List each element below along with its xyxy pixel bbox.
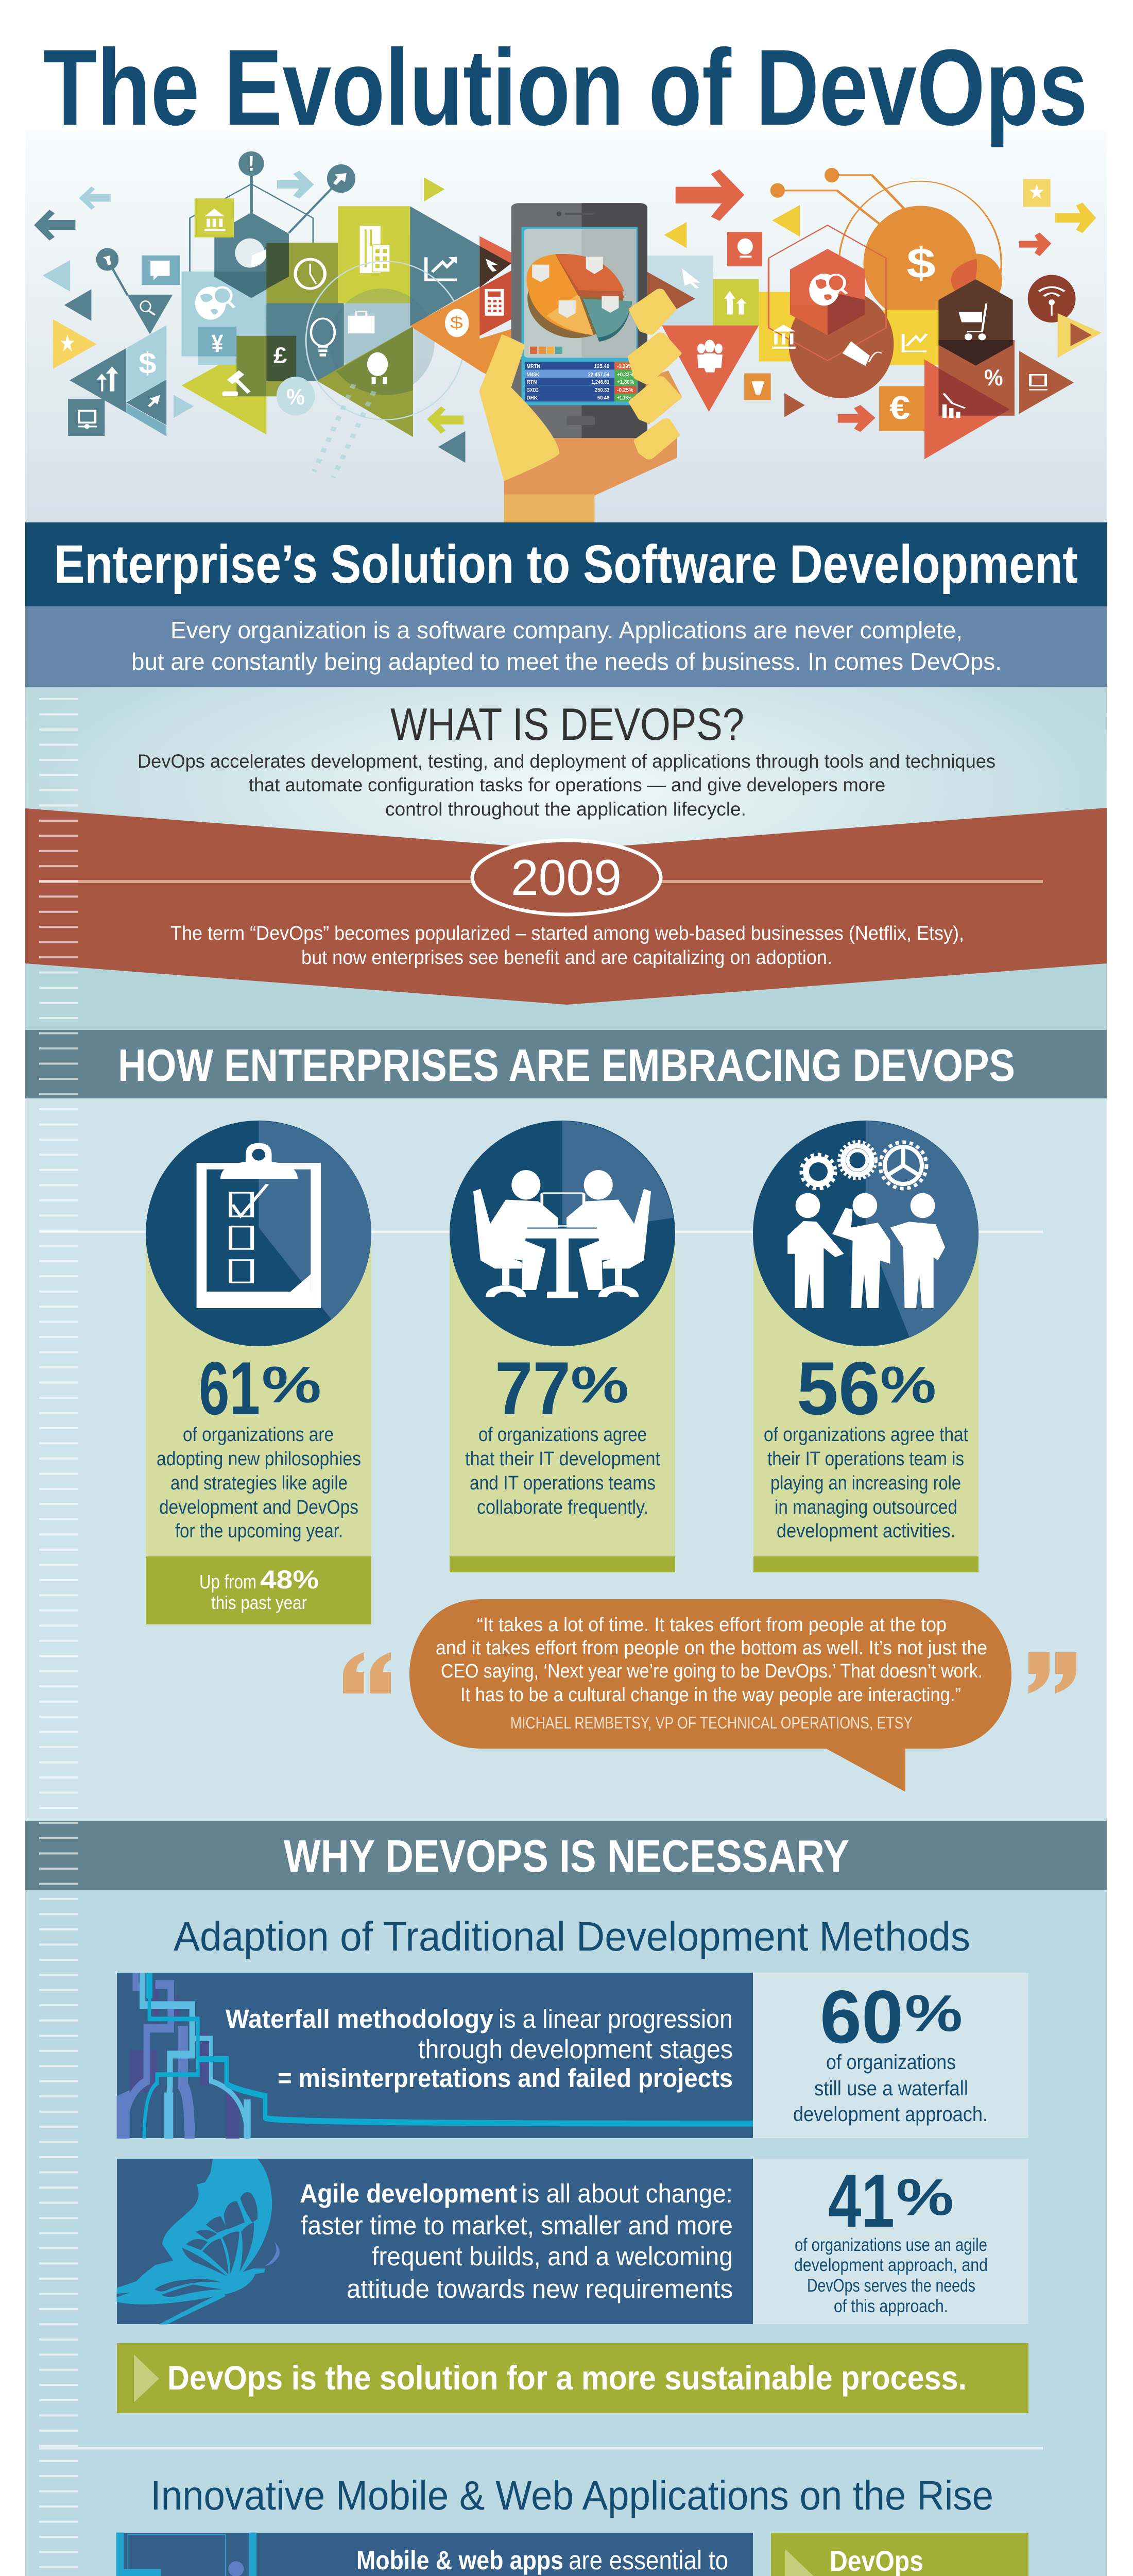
- hero illustration: phone, hand and right cluster: +1.13%: [617, 395, 631, 401]
- timeline ticks: [39, 698, 1043, 2576]
- panel: 2009 chevron: The term “DevOps” becomes popularized – started among web-based businesses (Netflix, Etsy),: [170, 923, 964, 944]
- panel: what is devops text: control throughout the application lifecycle.: [385, 799, 746, 820]
- callout: quote bubble: MICHAEL REMBETSY, VP OF TECHNICAL OPERATIONS, ETSY: [510, 1714, 913, 1732]
- hero illustration: left cluster: $: [139, 346, 157, 380]
- panel: agile: [117, 2159, 1028, 2325]
- panel: what is devops text: WHAT IS DEVOPS?: [390, 699, 744, 750]
- panel: waterfall: is a linear progression: [499, 2004, 733, 2033]
- stat column: 61%: for the upcoming year.: [175, 1520, 343, 1542]
- hero illustration: phone, hand and right cluster: DHK: [526, 395, 538, 401]
- stat column: 61%: 48%: [260, 1565, 319, 1594]
- panel: waterfall: development approach.: [793, 2103, 988, 2126]
- stat column: 77%: and IT operations teams: [470, 1472, 656, 1494]
- stat column: 61%: %: [262, 1356, 321, 1414]
- callout: quote bubble: CEO saying, ‘Next year we’re going to be DevOps.’ That doesn’t work.: [441, 1660, 983, 1682]
- panel: what is devops text: [138, 699, 995, 820]
- intro band: Every organization is a software company. Applications are never complete,: [170, 617, 963, 643]
- panel: what is devops text: DevOps accelerates development, testing, and deployment of applications through tools and techniques: [138, 751, 995, 772]
- section heading: why devops: WHY DEVOPS IS NECESSARY: [284, 1831, 849, 1882]
- icon: clipboard: [146, 1121, 371, 1346]
- hero illustration: phone, hand and right cluster: €: [889, 390, 910, 426]
- callout: solution bar: DevOps is the solution for a more sustainable process.: [167, 2359, 967, 2397]
- stat column: 77%: of organizations agree: [478, 1424, 647, 1446]
- stat column: 61%: this past year: [211, 1592, 307, 1613]
- hero illustration: left cluster: !: [248, 151, 254, 175]
- icon: people and gears: [753, 1121, 978, 1346]
- stat column: 56%: 56: [797, 1346, 880, 1430]
- panel: devops shortens time: [771, 2533, 1028, 2576]
- hero illustration: phone, hand and right cluster: RTN: [526, 379, 537, 385]
- stat column: 56%: %: [880, 1356, 936, 1414]
- hero illustration: phone, hand and right cluster: 1,246.61: [591, 379, 609, 385]
- icon: waterfall lines: [117, 1973, 753, 2139]
- hero illustration: left cluster: ¥: [211, 330, 224, 358]
- icon: quote marks: [343, 1652, 1076, 1693]
- stat column: 56%: their IT operations team is: [767, 1448, 964, 1470]
- panel: what is devops text: that automate configuration tasks for operations — and give developers more: [249, 774, 885, 795]
- stat column: 61%: adopting new philosophies: [157, 1448, 361, 1470]
- hero illustration: left cluster: ★: [59, 330, 76, 357]
- stat column: 61%: Up from: [199, 1571, 256, 1593]
- stat column: 61%: and strategies like agile: [170, 1472, 348, 1494]
- panel: agile: DevOps serves the needs: [807, 2276, 975, 2296]
- panel: 2009 chevron: 2009: [511, 849, 622, 906]
- panel: agile: of organizations use an agile: [795, 2235, 987, 2255]
- intro band: but are constantly being adapted to meet the needs of business. In comes DevOps.: [131, 648, 1002, 675]
- hero illustration: phone, hand and right cluster: %: [984, 365, 1003, 391]
- hero illustration: phone, hand and right cluster: $: [906, 240, 936, 287]
- hero illustration: phone, hand and right cluster: NNSK: [526, 371, 539, 378]
- stat column: 61%: 61: [199, 1346, 260, 1430]
- subheading: innovative mobile: Innovative Mobile & Web Applications on the Rise: [150, 2472, 993, 2518]
- section heading: how enterprises: HOW ENTERPRISES ARE EMBRACING DEVOPS: [118, 1040, 1015, 1091]
- panel: agile: %: [896, 2168, 954, 2226]
- banner: enterprise's solution: [25, 522, 1107, 606]
- stat column: 56%: [753, 1121, 978, 1572]
- panel: waterfall: through development stages: [418, 2035, 733, 2064]
- panel: agile: faster time to market, smaller and more: [301, 2211, 733, 2240]
- panel: waterfall: %: [905, 1985, 963, 2042]
- stat column: 56%: playing an increasing role: [770, 1472, 961, 1494]
- panel: waterfall: of organizations: [826, 2051, 956, 2074]
- hero illustration: phone, hand and right cluster: 60.48: [597, 395, 609, 401]
- section heading: why devops: [25, 1821, 1107, 1890]
- stat column: 77%: [450, 1121, 675, 1572]
- panel: waterfall: = misinterpretations and failed projects: [278, 2063, 733, 2093]
- panel: mobile and web apps: Mobile & web apps: [356, 2546, 563, 2575]
- hero illustration: phone, hand and right cluster: GXD2: [526, 387, 539, 393]
- section heading: how enterprises: [25, 1030, 1107, 1098]
- intro band: [25, 606, 1107, 687]
- subheading: adaption: Adaption of Traditional Development Methods: [174, 1913, 970, 1959]
- panel: agile: attitude towards new requirements: [347, 2274, 733, 2303]
- panel: agile: 41: [828, 2159, 895, 2243]
- panel: 2009 chevron: [25, 808, 1107, 1005]
- callout: quote bubble: It has to be a cultural change in the way people are interacting.”: [460, 1684, 961, 1706]
- hero illustration: phone, hand and right cluster: MRTN: [526, 363, 540, 370]
- callout: quote bubble: [409, 1599, 1011, 1792]
- icon: app windows: [114, 2533, 280, 2576]
- hero illustration: left cluster: £: [273, 343, 287, 368]
- stat column: 56%: of organizations agree that: [764, 1424, 968, 1446]
- hero illustration: phone, hand and right cluster: +1.80%: [617, 379, 634, 385]
- callout: solution bar: [117, 2343, 1028, 2413]
- callout: quote bubble: and it takes effort from people on the bottom as well. It’s not just the: [436, 1637, 987, 1659]
- stat column: 56%: in managing outsourced: [775, 1497, 957, 1518]
- panel: agile: frequent builds, and a welcoming: [372, 2242, 733, 2271]
- icon: butterfly: [117, 2159, 280, 2325]
- panel: waterfall: 60: [820, 1975, 903, 2059]
- hero illustration: phone, hand and right cluster: ★: [1028, 181, 1045, 204]
- stat column: 56%: development activities.: [777, 1520, 955, 1542]
- callout: quote bubble: “It takes a lot of time. It takes effort from people at the top: [477, 1614, 947, 1636]
- hero illustration: phone, hand and right cluster: -0.25%: [617, 387, 633, 393]
- icon: people at table: [450, 1121, 675, 1346]
- stat column: 77%: 77: [495, 1346, 571, 1430]
- panel: 2009 chevron: but now enterprises see benefit and are capitalizing on adoption.: [301, 947, 832, 969]
- panel: agile: is all about change:: [522, 2179, 733, 2208]
- stat column: 77%: that their IT development: [465, 1448, 660, 1470]
- panel: agile: Agile development: [300, 2179, 517, 2208]
- panel: agile: of this approach.: [834, 2296, 948, 2316]
- hero illustration: phone, hand and right cluster: [410, 168, 1102, 522]
- hero illustration: left cluster: %: [286, 384, 305, 410]
- panel: waterfall: Waterfall methodology: [226, 2004, 494, 2033]
- hero illustration: phone, hand and right cluster: +0.33%: [617, 371, 634, 378]
- stat column: 61%: [146, 1121, 371, 1624]
- panel: waterfall: [117, 1973, 1028, 2139]
- panel: waterfall: still use a waterfall: [814, 2077, 968, 2100]
- stat column: 77%: collaborate frequently.: [477, 1497, 648, 1518]
- stat column: 77%: %: [571, 1356, 629, 1414]
- stat column: 61%: of organizations are: [183, 1424, 334, 1446]
- hero illustration: phone, hand and right cluster: 22,457.54: [588, 371, 609, 378]
- hero illustration: phone, hand and right cluster: $: [450, 313, 463, 332]
- panel: mobile and web apps: [114, 2533, 753, 2576]
- hero illustration: phone, hand and right cluster: 125.49: [594, 363, 609, 370]
- hero illustration: phone, hand and right cluster: -1.29%: [617, 363, 632, 370]
- panel: agile: development approach, and: [794, 2255, 988, 2275]
- hero illustration: left cluster: [34, 151, 479, 478]
- panel: mobile and web apps: are essential to: [569, 2546, 728, 2575]
- stat column: 61%: development and DevOps: [159, 1497, 358, 1518]
- hero illustration: phone, hand and right cluster: 250.33: [595, 387, 609, 393]
